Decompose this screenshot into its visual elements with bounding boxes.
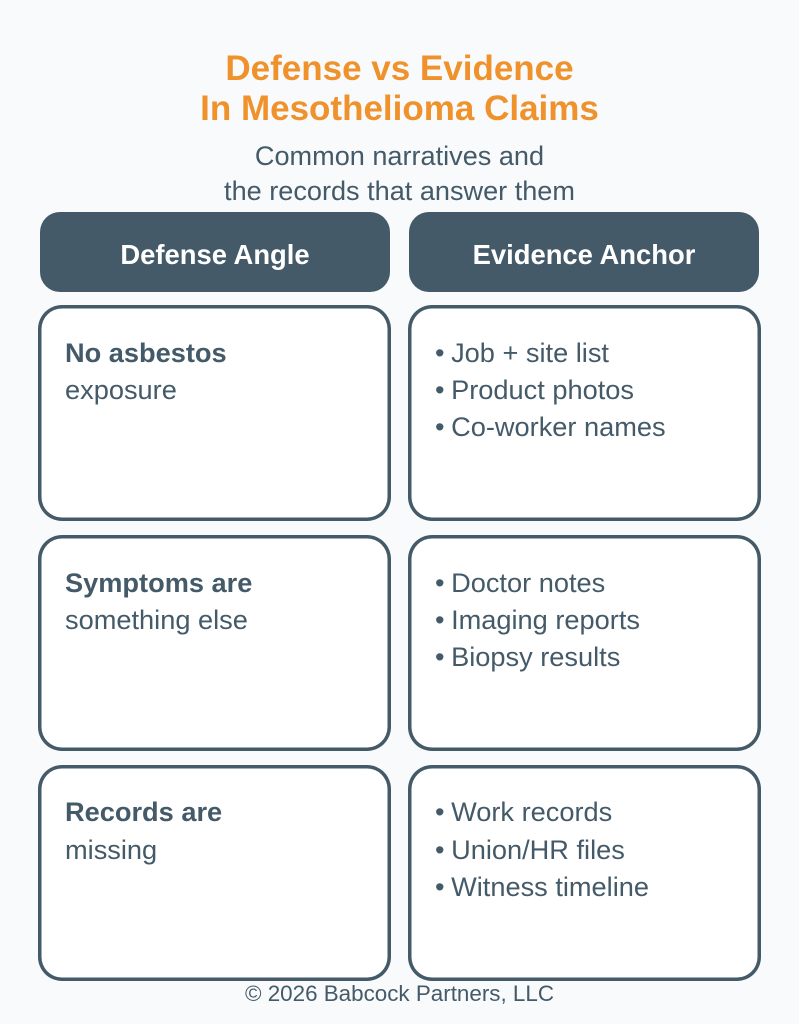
- card: exposure evidence: • Co-worker names: [435, 411, 666, 442]
- title: Defense vs Evidence: [225, 49, 574, 88]
- card: no asbestos exposure: [38, 305, 391, 521]
- subtitle: the records that answer them: [224, 175, 575, 206]
- column header: evidence anchor: Evidence Anchor: [473, 239, 695, 270]
- card: records evidence: • Witness timeline: [435, 871, 649, 902]
- card: exposure evidence: • Job + site list: [435, 337, 609, 368]
- card: records evidence: [408, 765, 761, 981]
- card: records are missing: Records are: [65, 796, 222, 827]
- card: records evidence: • Union/HR files: [435, 834, 625, 865]
- card: medical evidence: [408, 535, 761, 751]
- card: exposure evidence: • Product photos: [435, 374, 634, 405]
- subtitle: [224, 140, 575, 206]
- column header: evidence anchor: [409, 212, 759, 292]
- card: records are missing: missing: [65, 834, 157, 865]
- title: In Mesothelioma Claims: [200, 89, 599, 128]
- footer copyright: © 2026 Babcock Partners, LLC: [245, 981, 554, 1006]
- card: records evidence: • Work records: [435, 796, 612, 827]
- card: no asbestos exposure: exposure: [65, 374, 177, 405]
- card: exposure evidence: [408, 305, 761, 521]
- column header: defense angle: [40, 212, 390, 292]
- card: no asbestos exposure: No asbestos: [65, 337, 227, 368]
- card: records are missing: [38, 765, 391, 981]
- card: medical evidence: • Imaging reports: [435, 604, 640, 635]
- title: [200, 49, 599, 128]
- card: symptoms are something else: something else: [65, 604, 248, 635]
- card: medical evidence: • Doctor notes: [435, 567, 605, 598]
- card: symptoms are something else: Symptoms are: [65, 567, 252, 598]
- card: symptoms are something else: [38, 535, 391, 751]
- column header: defense angle: Defense Angle: [120, 239, 310, 270]
- card: medical evidence: • Biopsy results: [435, 641, 620, 672]
- subtitle: Common narratives and: [255, 140, 544, 171]
